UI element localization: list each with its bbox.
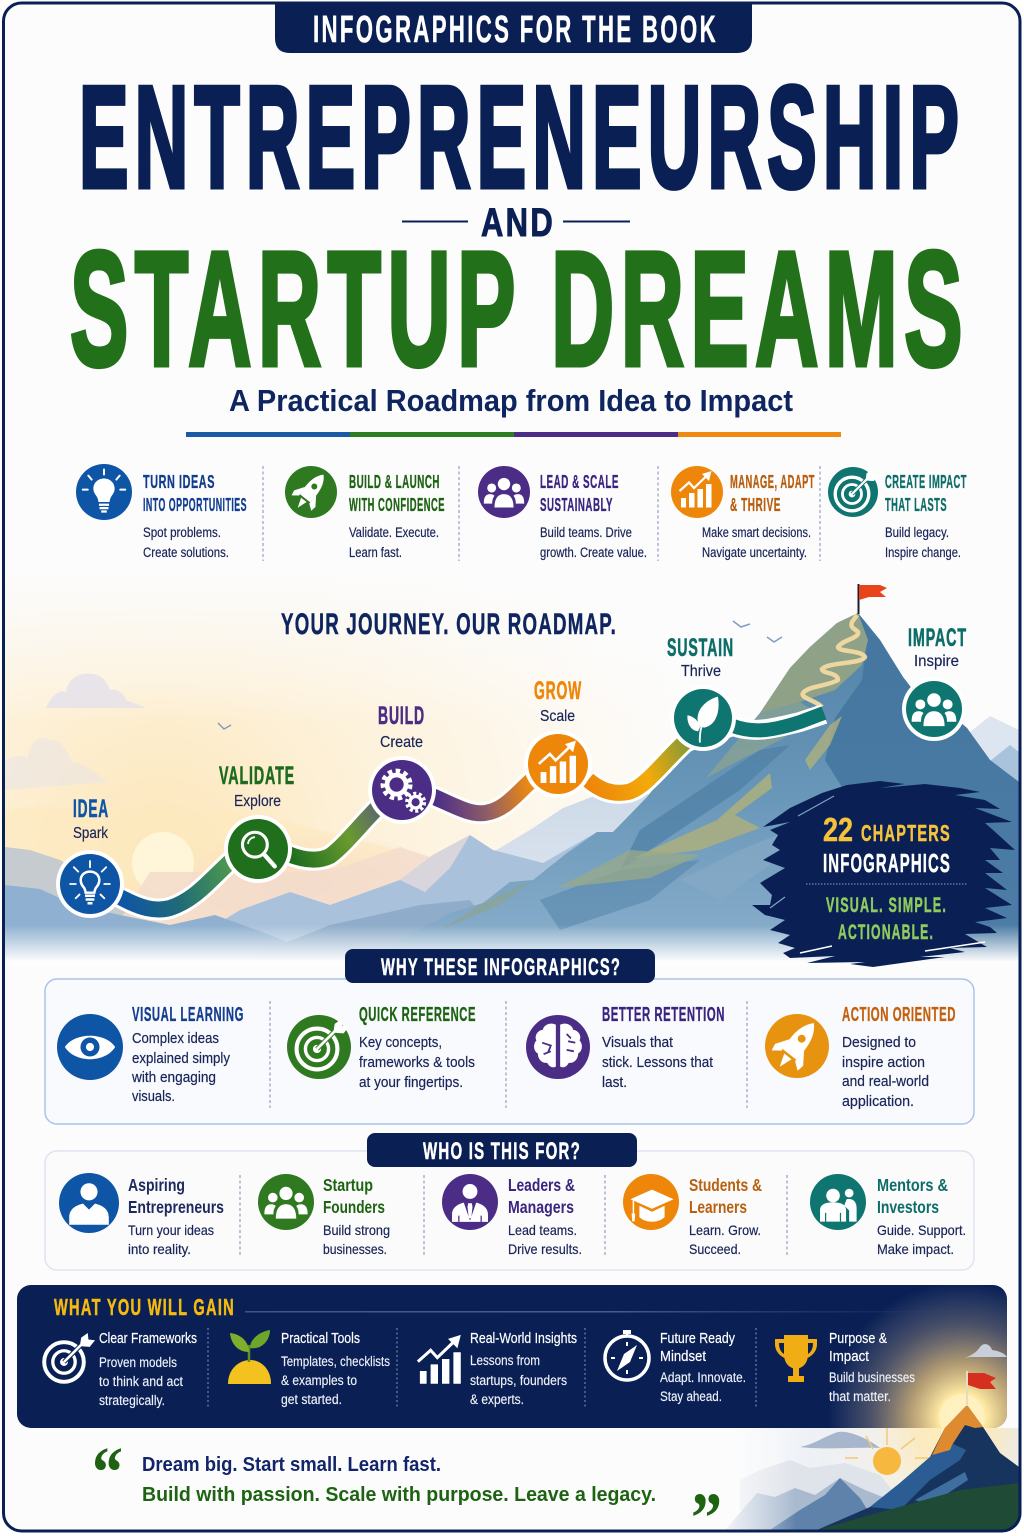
- gain heading: WHAT YOU WILL GAIN: [54, 1294, 235, 1320]
- promise: build and launch: Validate. Execute.: [349, 525, 439, 540]
- gain: practical tools: [228, 1330, 390, 1407]
- benefit: action oriented: inspire action: [842, 1055, 925, 1071]
- promise: turn ideas: TURN IDEAS: [143, 471, 215, 492]
- audience: students and learners: Students &: [689, 1175, 762, 1195]
- quote: Dream big. Start small. Learn fast.: [142, 1454, 441, 1476]
- stage: grow: GROW: [534, 677, 582, 705]
- callout: 22 chapters: CHAPTERS: [861, 820, 951, 846]
- audience: aspiring entrepreneurs: [59, 1173, 224, 1257]
- audience: leaders and managers: Leaders &: [508, 1175, 575, 1195]
- gain: future ready mindset: Stay ahead.: [660, 1389, 722, 1404]
- roadmap illustration: [5, 565, 1019, 967]
- vignette flag: [966, 1371, 996, 1406]
- gain: clear frameworks: Proven models: [99, 1355, 177, 1370]
- panel: five promises: INTO OPPORTUNITIES: [143, 494, 247, 515]
- summit trail: [803, 615, 865, 707]
- audience: mentors and investors: [810, 1174, 966, 1257]
- flag: [858, 584, 887, 614]
- gain: purpose and impact: [775, 1330, 915, 1404]
- banner: who is this for: WHO IS THIS FOR?: [423, 1138, 581, 1165]
- promise: lead and scale: [478, 466, 647, 560]
- audience: leaders and managers: Managers: [508, 1197, 574, 1217]
- gain: purpose and impact: that matter.: [829, 1389, 891, 1404]
- callout: 22 chapters: 22: [823, 811, 853, 848]
- promise: turn ideas: Create solutions.: [143, 545, 229, 560]
- audience: students and learners: Learn. Grow.: [689, 1222, 761, 1238]
- icon: trophy: [775, 1335, 817, 1382]
- promise: create impact: THAT LASTS: [885, 494, 947, 515]
- gain: clear frameworks: [44, 1330, 197, 1408]
- gain: future ready mindset: [605, 1330, 746, 1404]
- promise: create impact: Inspire change.: [885, 545, 961, 560]
- gain: future ready mindset: Mindset: [660, 1348, 707, 1365]
- benefit: visual learning: Complex ideas: [132, 1031, 219, 1047]
- audience: aspiring entrepreneurs: Aspiring: [128, 1175, 185, 1195]
- callout: 22 chapters: [752, 781, 1015, 967]
- benefit: better retention: last.: [602, 1075, 627, 1091]
- gain: future ready mindset: Adapt. Innovate.: [660, 1370, 746, 1385]
- vignette background: [726, 1428, 1018, 1530]
- promise: manage and adapt: & THRIVE: [730, 494, 781, 515]
- title: [70, 56, 969, 400]
- vignette far mountains: [726, 1460, 892, 1530]
- promise: build and launch: [285, 466, 445, 560]
- vignette sun and clouds: [800, 1428, 930, 1475]
- audience: aspiring entrepreneurs: Entrepreneurs: [128, 1197, 224, 1217]
- promise: turn ideas: Spot problems.: [143, 525, 221, 540]
- audience: startup founders: Founders: [323, 1197, 385, 1217]
- stage: build: BUILD: [378, 702, 425, 730]
- opening quote mark: “: [92, 1432, 123, 1512]
- top banner: [275, 2, 752, 53]
- icon: stopwatch compass: [605, 1330, 649, 1380]
- gain: real-world insights: Lessons from: [470, 1353, 540, 1368]
- bottom haze: [5, 925, 1019, 967]
- journey heading: YOUR JOURNEY. OUR ROADMAP.: [281, 608, 617, 641]
- far mountains: [5, 716, 1019, 965]
- promise: lead and scale: LEAD & SCALE: [540, 471, 619, 492]
- stage: validate: [219, 762, 295, 883]
- gain: purpose and impact: Purpose &: [829, 1330, 887, 1347]
- benefit: better retention: stick. Lessons that: [602, 1055, 713, 1071]
- panel: five promises: [76, 464, 967, 561]
- top banner: INFOGRAPHICS FOR THE BOOK: [313, 9, 718, 51]
- audience: mentors and investors: Guide. Support.: [877, 1222, 966, 1238]
- panel: who is this for: [45, 1133, 974, 1270]
- gain: clear frameworks: Clear Frameworks: [99, 1330, 197, 1347]
- benefit: visual learning: explained simply: [132, 1051, 231, 1067]
- stage: sustain: SUSTAIN: [667, 634, 734, 662]
- main mountain: [380, 613, 1019, 965]
- callout: 22 chapters: VISUAL. SIMPLE.: [826, 894, 947, 917]
- audience: leaders and managers: [442, 1174, 582, 1257]
- benefit: action oriented: application.: [842, 1094, 914, 1110]
- stage: sustain: Thrive: [681, 663, 721, 680]
- banner: why these infographics: WHY THESE INFOGRAPHICS?: [381, 954, 621, 981]
- benefit: better retention: [526, 1004, 725, 1091]
- panel: what you will gain: [17, 1285, 1007, 1428]
- title connector: and: AND: [481, 201, 555, 245]
- promise: manage and adapt: [671, 466, 815, 560]
- gain: clear frameworks: to think and act: [99, 1374, 183, 1389]
- promise: lead and scale: SUSTAINABLY: [540, 494, 613, 515]
- promise: turn ideas: [76, 464, 247, 560]
- stage: impact: IMPACT: [908, 624, 967, 652]
- gain: practical tools: get started.: [281, 1392, 342, 1407]
- gain: purpose and impact: Impact: [829, 1348, 870, 1365]
- audience: startup founders: [258, 1174, 390, 1257]
- stage: impact: Inspire: [914, 653, 959, 670]
- gain: purpose and impact: Build businesses: [829, 1370, 915, 1385]
- quote: [92, 1432, 722, 1536]
- stage: build: [368, 702, 436, 824]
- birds: [218, 621, 782, 729]
- icon: target: [44, 1333, 95, 1382]
- audience: mentors and investors: Make impact.: [877, 1241, 954, 1257]
- promise: build and launch: BUILD & LAUNCH: [349, 471, 440, 492]
- gain: future ready mindset: Future Ready: [660, 1330, 735, 1347]
- audience: mentors and investors: Mentors &: [877, 1175, 948, 1195]
- quote: Build with passion. Scale with purpose. Leave a legacy.: [142, 1484, 656, 1506]
- gain: real-world insights: [418, 1330, 577, 1407]
- audience: aspiring entrepreneurs: into reality.: [128, 1241, 191, 1257]
- stage: grow: [524, 677, 592, 798]
- benefit: visual learning: with engaging: [131, 1070, 216, 1086]
- summit vignette: [726, 1371, 1018, 1530]
- stage: idea: Spark: [73, 825, 109, 842]
- gain: practical tools: & examples to: [281, 1373, 357, 1388]
- audience: leaders and managers: Lead teams.: [508, 1222, 577, 1238]
- icon: sprout: [228, 1330, 271, 1384]
- benefit: quick reference: QUICK REFERENCE: [359, 1004, 476, 1026]
- callout: 22 chapters: ACTIONABLE.: [838, 921, 934, 944]
- panel: why these infographics: [45, 949, 974, 1124]
- path ribbons: [120, 713, 824, 910]
- gain: practical tools: Templates, checklists: [281, 1354, 390, 1369]
- audience: aspiring entrepreneurs: Turn your ideas: [128, 1222, 214, 1238]
- colour bar: [186, 432, 841, 437]
- sky and sun: [5, 565, 1019, 965]
- benefit: action oriented: Designed to: [842, 1035, 916, 1051]
- promise: lead and scale: Build teams. Drive: [540, 525, 632, 540]
- audience: students and learners: [623, 1174, 762, 1257]
- audience: startup founders: Startup: [323, 1175, 373, 1195]
- benefit: visual learning: VISUAL LEARNING: [132, 1004, 244, 1026]
- banner: who is this for: [367, 1133, 637, 1167]
- audience: students and learners: Succeed.: [689, 1241, 741, 1257]
- benefit: action oriented: and real-world: [842, 1074, 929, 1090]
- stage: idea: IDEA: [73, 795, 109, 823]
- icon: rising chart: [418, 1335, 461, 1384]
- promise: create impact: Build legacy.: [885, 525, 949, 540]
- clouds: [5, 674, 146, 790]
- stage: sustain: [667, 634, 736, 751]
- benefit: quick reference: Key concepts,: [359, 1035, 442, 1051]
- gain: real-world insights: Real-World Insights: [470, 1330, 577, 1347]
- benefit: action oriented: [765, 1004, 956, 1110]
- sunrise glow: [834, 1288, 1007, 1428]
- promise: build and launch: Learn fast.: [349, 545, 402, 560]
- audience: startup founders: Build strong: [323, 1222, 390, 1238]
- banner: why these infographics: [345, 949, 655, 983]
- benefit: visual learning: [57, 1004, 244, 1105]
- vignette peak: [817, 1405, 1019, 1530]
- benefit: quick reference: [287, 1004, 476, 1091]
- benefit: better retention: BETTER RETENTION: [602, 1004, 725, 1026]
- stage: validate: VALIDATE: [219, 762, 295, 790]
- audience: leaders and managers: Drive results.: [508, 1241, 582, 1257]
- stage: grow: Scale: [540, 708, 575, 725]
- promise: manage and adapt: Make smart decisions.: [702, 525, 811, 540]
- stage: build: Create: [380, 734, 423, 751]
- gain: real-world insights: startups, founders: [470, 1373, 567, 1388]
- audience: students and learners: Learners: [689, 1197, 747, 1217]
- benefit: quick reference: at your fingertips.: [359, 1075, 463, 1091]
- promise: manage and adapt: Navigate uncertainty.: [702, 545, 807, 560]
- gain: practical tools: Practical Tools: [281, 1330, 360, 1347]
- promise: build and launch: WITH CONFIDENCE: [349, 494, 445, 515]
- benefit: visual learning: visuals.: [132, 1089, 175, 1105]
- stage: validate: Explore: [234, 793, 281, 810]
- audience: startup founders: businesses.: [323, 1241, 387, 1257]
- gain: real-world insights: & experts.: [470, 1392, 524, 1407]
- stage: impact: [902, 624, 967, 741]
- benefit: quick reference: frameworks & tools: [359, 1055, 475, 1071]
- benefit: better retention: Visuals that: [602, 1035, 673, 1051]
- stage: idea: [56, 795, 124, 918]
- promise: lead and scale: growth. Create value.: [540, 545, 647, 560]
- promise: manage and adapt: MANAGE, ADAPT: [730, 471, 815, 492]
- promise: create impact: [828, 467, 967, 560]
- subtitle: A Practical Roadmap from Idea to Impact: [229, 383, 793, 418]
- audience: mentors and investors: Investors: [877, 1197, 939, 1217]
- gain: clear frameworks: strategically.: [99, 1393, 165, 1408]
